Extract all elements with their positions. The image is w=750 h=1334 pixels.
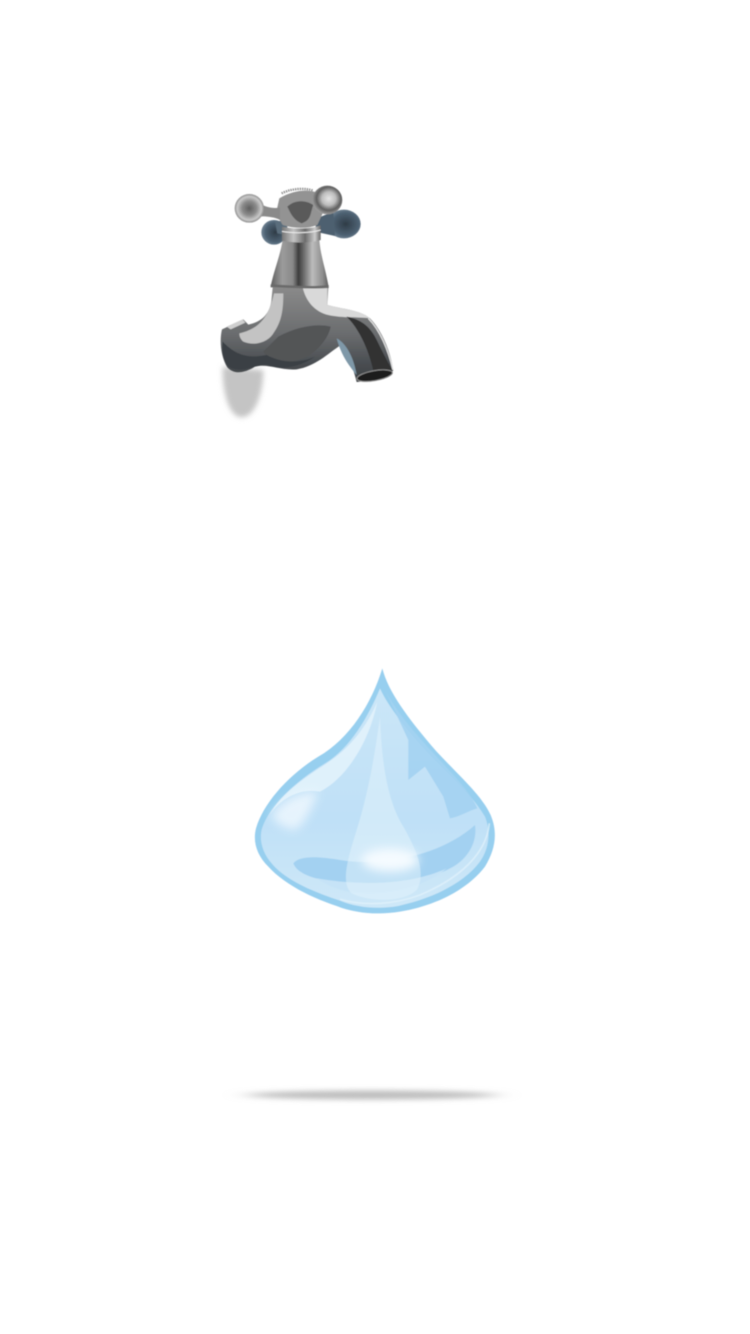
faucet neck xyxy=(271,240,329,288)
central pale column xyxy=(346,717,421,900)
faucet spout and body xyxy=(221,287,393,382)
drop inner body xyxy=(261,688,489,908)
left rim highlight xyxy=(269,702,377,815)
rim stroke xyxy=(340,823,489,904)
water drop xyxy=(255,668,495,913)
right handle knob xyxy=(312,186,342,214)
lower inner reflection xyxy=(317,868,447,893)
spout opening xyxy=(356,368,393,384)
faucet collar xyxy=(282,225,321,243)
right darker facet xyxy=(385,690,477,818)
drop outer shape xyxy=(255,668,495,913)
faucet wall shadow xyxy=(223,367,263,417)
ground shadow xyxy=(247,1090,497,1100)
lower darker band xyxy=(293,825,475,885)
central glare xyxy=(362,848,418,872)
faucet xyxy=(221,186,393,417)
handle cap xyxy=(276,191,323,228)
rear blue-grey handle knobs xyxy=(261,210,361,245)
spout highlights xyxy=(222,287,393,377)
left handle knob xyxy=(235,194,280,223)
left glare xyxy=(272,792,318,830)
